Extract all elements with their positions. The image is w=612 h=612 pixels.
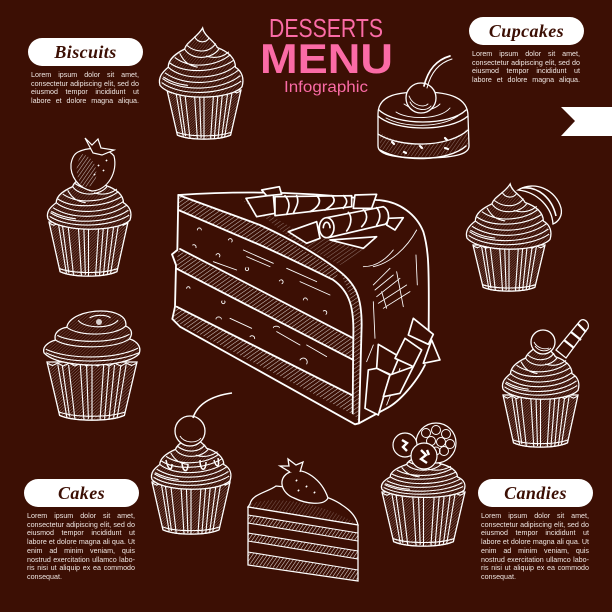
text block: Candies: eiusmod tempor incididunt ut	[481, 529, 589, 537]
text block: Cakes: enim ad minim veniam, quis	[27, 547, 135, 555]
cake: round with cherry	[378, 56, 469, 159]
text block: Cakes: consequat.	[27, 573, 62, 581]
text block: Cupcakes: eiusmod tempor incididunt ut	[472, 67, 580, 75]
panel: Biscuits	[28, 38, 143, 105]
panel: Cakes	[24, 479, 139, 581]
text block: Candies: consectetur adipiscing elit, sed do	[481, 521, 589, 529]
cupcake: top swirl	[159, 28, 243, 139]
cupcake: orange slice	[466, 184, 561, 291]
title: Desserts Menu Infographic: MENU	[260, 35, 393, 82]
text block: Candies: nostrud exercitation ullamco labo-	[481, 556, 589, 564]
text block: Candies: ris nisi ut aliquip ex ea commodo	[481, 564, 589, 572]
text block: Cupcakes: Lorem ipsum dolor sit amet,	[472, 50, 580, 58]
title: Desserts Menu Infographic: DESSERTS	[269, 13, 383, 43]
cupcake: strawberry	[47, 138, 131, 276]
heading: Cupcakes: Cupcakes	[489, 21, 564, 41]
text block: Cakes: labore et dolore magna ali qua. Ut	[27, 538, 135, 546]
text block: Cakes: nostrud exercitation ullamco labo-	[27, 556, 135, 564]
heading: Cakes	[24, 479, 139, 507]
text block: Biscuits: Lorem ipsum dolor sit amet,	[31, 71, 139, 79]
text block: Biscuits: eiusmod tempor incididunt ut	[31, 88, 139, 96]
heading: Cakes: Cakes	[58, 483, 105, 503]
ribbon banner	[561, 107, 612, 136]
text block: Cupcakes	[472, 50, 580, 84]
text block: Candies: enim ad minim veniam, quis	[481, 547, 589, 555]
text block: Candies	[481, 512, 589, 581]
text block: Cakes	[27, 512, 135, 581]
text block: Cakes: eiusmod tempor incididunt ut	[27, 529, 135, 537]
text block: Cakes: ris nisi ut aliquip ex ea commodo	[27, 564, 135, 572]
text block: Biscuits: labore et dolore magna aliqua.	[31, 97, 139, 105]
text block: Candies: consequat.	[481, 573, 516, 581]
text block: Cupcakes: consectetur adipiscing elit, sed do	[472, 59, 580, 67]
cupcake: cherry	[151, 393, 232, 534]
cupcake: wafer and ball	[502, 320, 588, 447]
heading: Candies: Candies	[504, 483, 567, 503]
title: Desserts Menu Infographic	[260, 13, 393, 96]
cupcake: rolled swirl	[44, 311, 140, 420]
heading: Cupcakes	[469, 17, 584, 45]
text block: Candies: labore et dolore magna ali qua. Ut	[481, 538, 589, 546]
illustration: large cake slice	[172, 187, 440, 424]
text block: Cupcakes: labore et dolore magna aliqua.	[472, 76, 580, 84]
text block: Biscuits	[31, 71, 139, 105]
title: Desserts Menu Infographic: Infographic	[284, 79, 368, 96]
panel: Candies	[478, 479, 593, 581]
text block: Biscuits: consectetur adipiscing elit, sed do	[31, 80, 139, 88]
panel: Cupcakes	[469, 17, 584, 84]
heading: Candies	[478, 479, 593, 507]
cake slice: small strawberry layer cake	[248, 459, 358, 581]
heading: Biscuits: Biscuits	[54, 42, 117, 62]
text block: Cakes: Lorem ipsum dolor sit amet,	[27, 512, 135, 520]
heading: Biscuits	[28, 38, 143, 66]
text block: Cakes: consectetur adipiscing elit, sed do	[27, 521, 135, 529]
cupcake: raspberry and blueberries	[381, 423, 465, 546]
text block: Candies: Lorem ipsum dolor sit amet,	[481, 512, 589, 520]
